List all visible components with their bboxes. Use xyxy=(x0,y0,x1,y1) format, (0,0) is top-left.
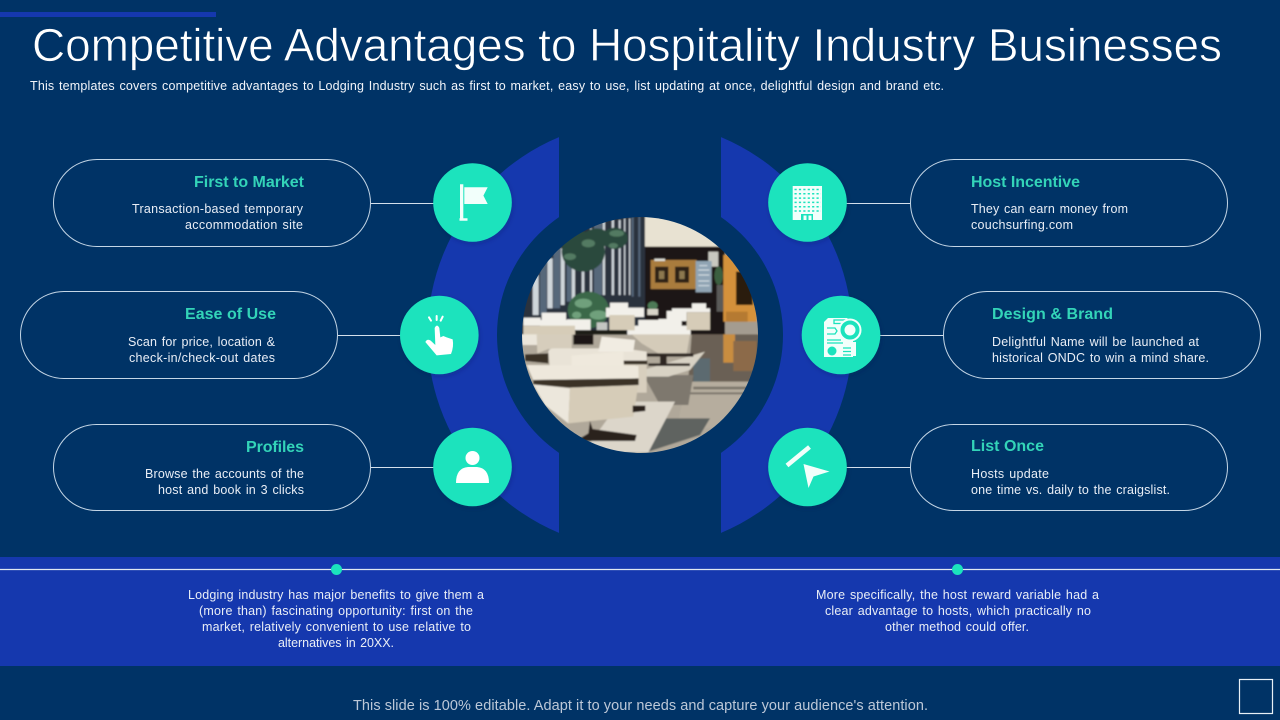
panel: Ease of Use: Ease of Use xyxy=(185,306,276,323)
icon: navigation arrow xyxy=(768,428,847,506)
middle chair xyxy=(548,348,648,366)
bottom band xyxy=(0,557,1280,666)
panel: First to Market: accommodation site xyxy=(185,218,303,232)
ring: left arc xyxy=(431,137,559,533)
band text: left: market, relatively convenient to use relative to xyxy=(202,620,471,634)
panel: List Once xyxy=(910,424,1228,510)
band text: left: Lodging industry has major benefits to give them a xyxy=(188,588,484,602)
band text: left: alternatives in 20XX. xyxy=(278,636,394,650)
panel: Design & Brand xyxy=(944,292,1260,378)
front chair xyxy=(622,360,625,366)
icon: person xyxy=(433,428,512,506)
panel: Profiles: Browse the accounts of the xyxy=(145,467,304,481)
panel: Host Incentive: Host Incentive xyxy=(971,174,1080,191)
panel: Profiles: host and book in 3 clicks xyxy=(158,483,304,497)
icon: flag xyxy=(433,163,512,242)
placeholder square xyxy=(1240,680,1272,714)
panel: First to Market: First to Market xyxy=(194,174,305,191)
band text: left xyxy=(188,588,484,650)
subtitle: This templates covers competitive advantages to Lodging Industry such as first to market, easy to use, list updating at once, delightful design and brand etc. xyxy=(30,79,944,93)
back chairs xyxy=(523,303,710,335)
footer note: This slide is 100% editable. Adapt it to your needs and capture your audience's attention. xyxy=(353,698,928,714)
ring: right arc xyxy=(721,137,849,533)
panel: Ease of Use xyxy=(20,292,338,378)
band text: left: (more than) fascinating opportunity: first on the xyxy=(199,604,473,618)
accent bar xyxy=(0,12,216,17)
panel: List Once: one time vs. daily to the craigslist. xyxy=(971,483,1170,497)
photo: hotel lobby xyxy=(520,215,760,458)
panel: Host Incentive: couchsurfing.com xyxy=(971,218,1073,232)
panel: First to Market: Transaction-based temporary xyxy=(132,202,304,216)
panel: Host Incentive: They can earn money from xyxy=(971,202,1128,216)
panel: Host Incentive xyxy=(910,160,1228,246)
band text: right: other method could offer. xyxy=(885,620,1029,634)
panel: List Once: Hosts update xyxy=(971,467,1049,481)
panel: Design & Brand: Delightful Name will be launched at xyxy=(992,335,1200,349)
band text: right: clear advantage to hosts, which practically no xyxy=(825,604,1091,618)
band text: right: More specifically, the host reward variable had a xyxy=(816,588,1099,602)
connector lines xyxy=(338,204,943,468)
band text: right xyxy=(816,588,1099,634)
icon: document and magnifier xyxy=(802,296,880,374)
panel: Design & Brand: Design & Brand xyxy=(992,306,1113,323)
icon: pointing hand xyxy=(400,296,479,374)
panel: Ease of Use: Scan for price, location & xyxy=(128,335,276,349)
panel: Ease of Use: check-in/check-out dates xyxy=(129,351,275,365)
panel: Profiles xyxy=(54,424,370,510)
icon: building xyxy=(768,163,847,242)
panel: Profiles: Profiles xyxy=(246,439,304,456)
tree xyxy=(562,228,628,272)
upper chairs xyxy=(522,334,538,345)
title: Competitive Advantages to Hospitality Industry Businesses xyxy=(32,19,1222,71)
panel: List Once: List Once xyxy=(971,438,1044,455)
bush xyxy=(568,292,609,328)
panel: Design & Brand: historical ONDC to win a mind share. xyxy=(992,351,1209,365)
panel: First to Market xyxy=(54,160,370,246)
